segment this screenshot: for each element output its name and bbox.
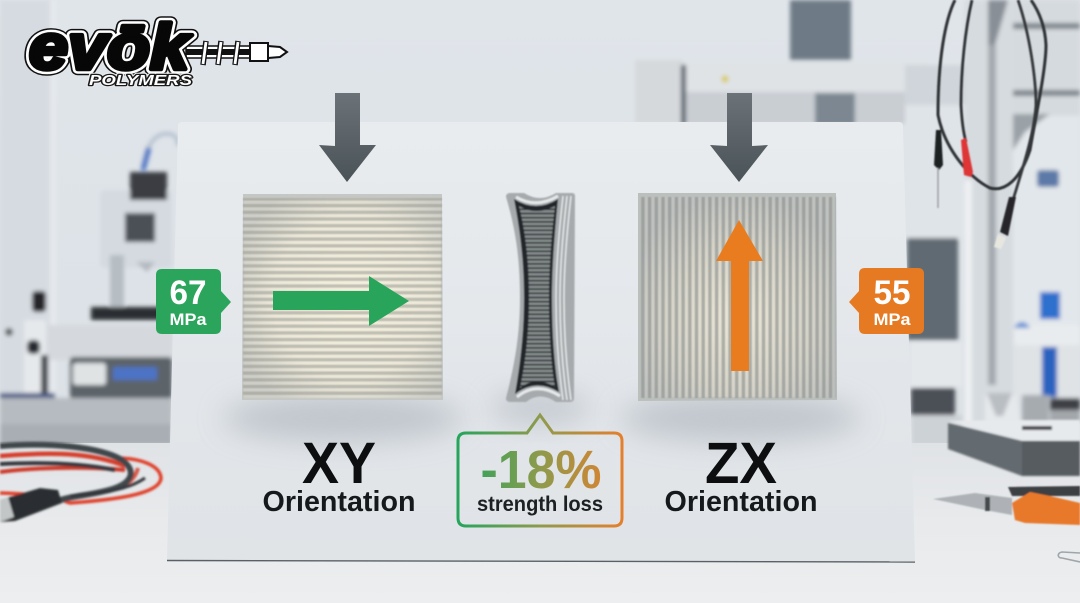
badge: ZX 55 MPa [849, 268, 924, 334]
icon: green arrow in-plane load [273, 276, 409, 326]
fractured specimen [506, 193, 575, 402]
pliers [933, 486, 1080, 525]
base block right [948, 420, 1080, 476]
logo: evok polymers: POLYMERS [89, 72, 192, 89]
coiled cables left [0, 445, 161, 522]
callout: strength loss [458, 415, 622, 526]
wall machine top centre [635, 0, 926, 125]
logo: evok polymers: evōk [29, 11, 193, 83]
label: ZX Orientation [664, 431, 818, 518]
hanging cables and clips [934, 0, 1046, 249]
label: XY Orientation: XY [302, 431, 376, 496]
logo: evok polymers: evōk [29, 11, 193, 83]
panel: white board [167, 122, 915, 562]
label: XY Orientation [262, 431, 416, 518]
XY sample block [242, 194, 443, 400]
icon: orange arrow vertical load [716, 220, 763, 371]
callout: strength loss: -18% [480, 440, 602, 500]
label: ZX Orientation: Orientation [664, 486, 818, 518]
badge: XY 67 MPa: MPa [170, 310, 207, 329]
logo: evok polymers: evōk [29, 11, 193, 83]
paperclip [1058, 552, 1080, 562]
logo: evok polymers: POLYMERS [89, 72, 192, 89]
badge: XY 67 MPa [156, 269, 231, 334]
logo: evok polymers [29, 11, 287, 89]
label: XY Orientation: Orientation [262, 486, 416, 518]
label: ZX Orientation: ZX [705, 431, 777, 496]
icon: downward load arrow left [319, 93, 376, 182]
icon: downward load arrow right [710, 93, 768, 182]
logo: evok polymers: POLYMERS [89, 72, 192, 89]
right side equipment [905, 0, 1080, 445]
callout: strength loss: strength loss [477, 493, 603, 516]
badge: ZX 55 MPa: 55 [874, 274, 910, 312]
ZX sample block [638, 193, 837, 401]
badge: XY 67 MPa: 67 [170, 274, 206, 312]
badge: ZX 55 MPa: MPa [874, 310, 911, 329]
left printer [0, 134, 178, 445]
